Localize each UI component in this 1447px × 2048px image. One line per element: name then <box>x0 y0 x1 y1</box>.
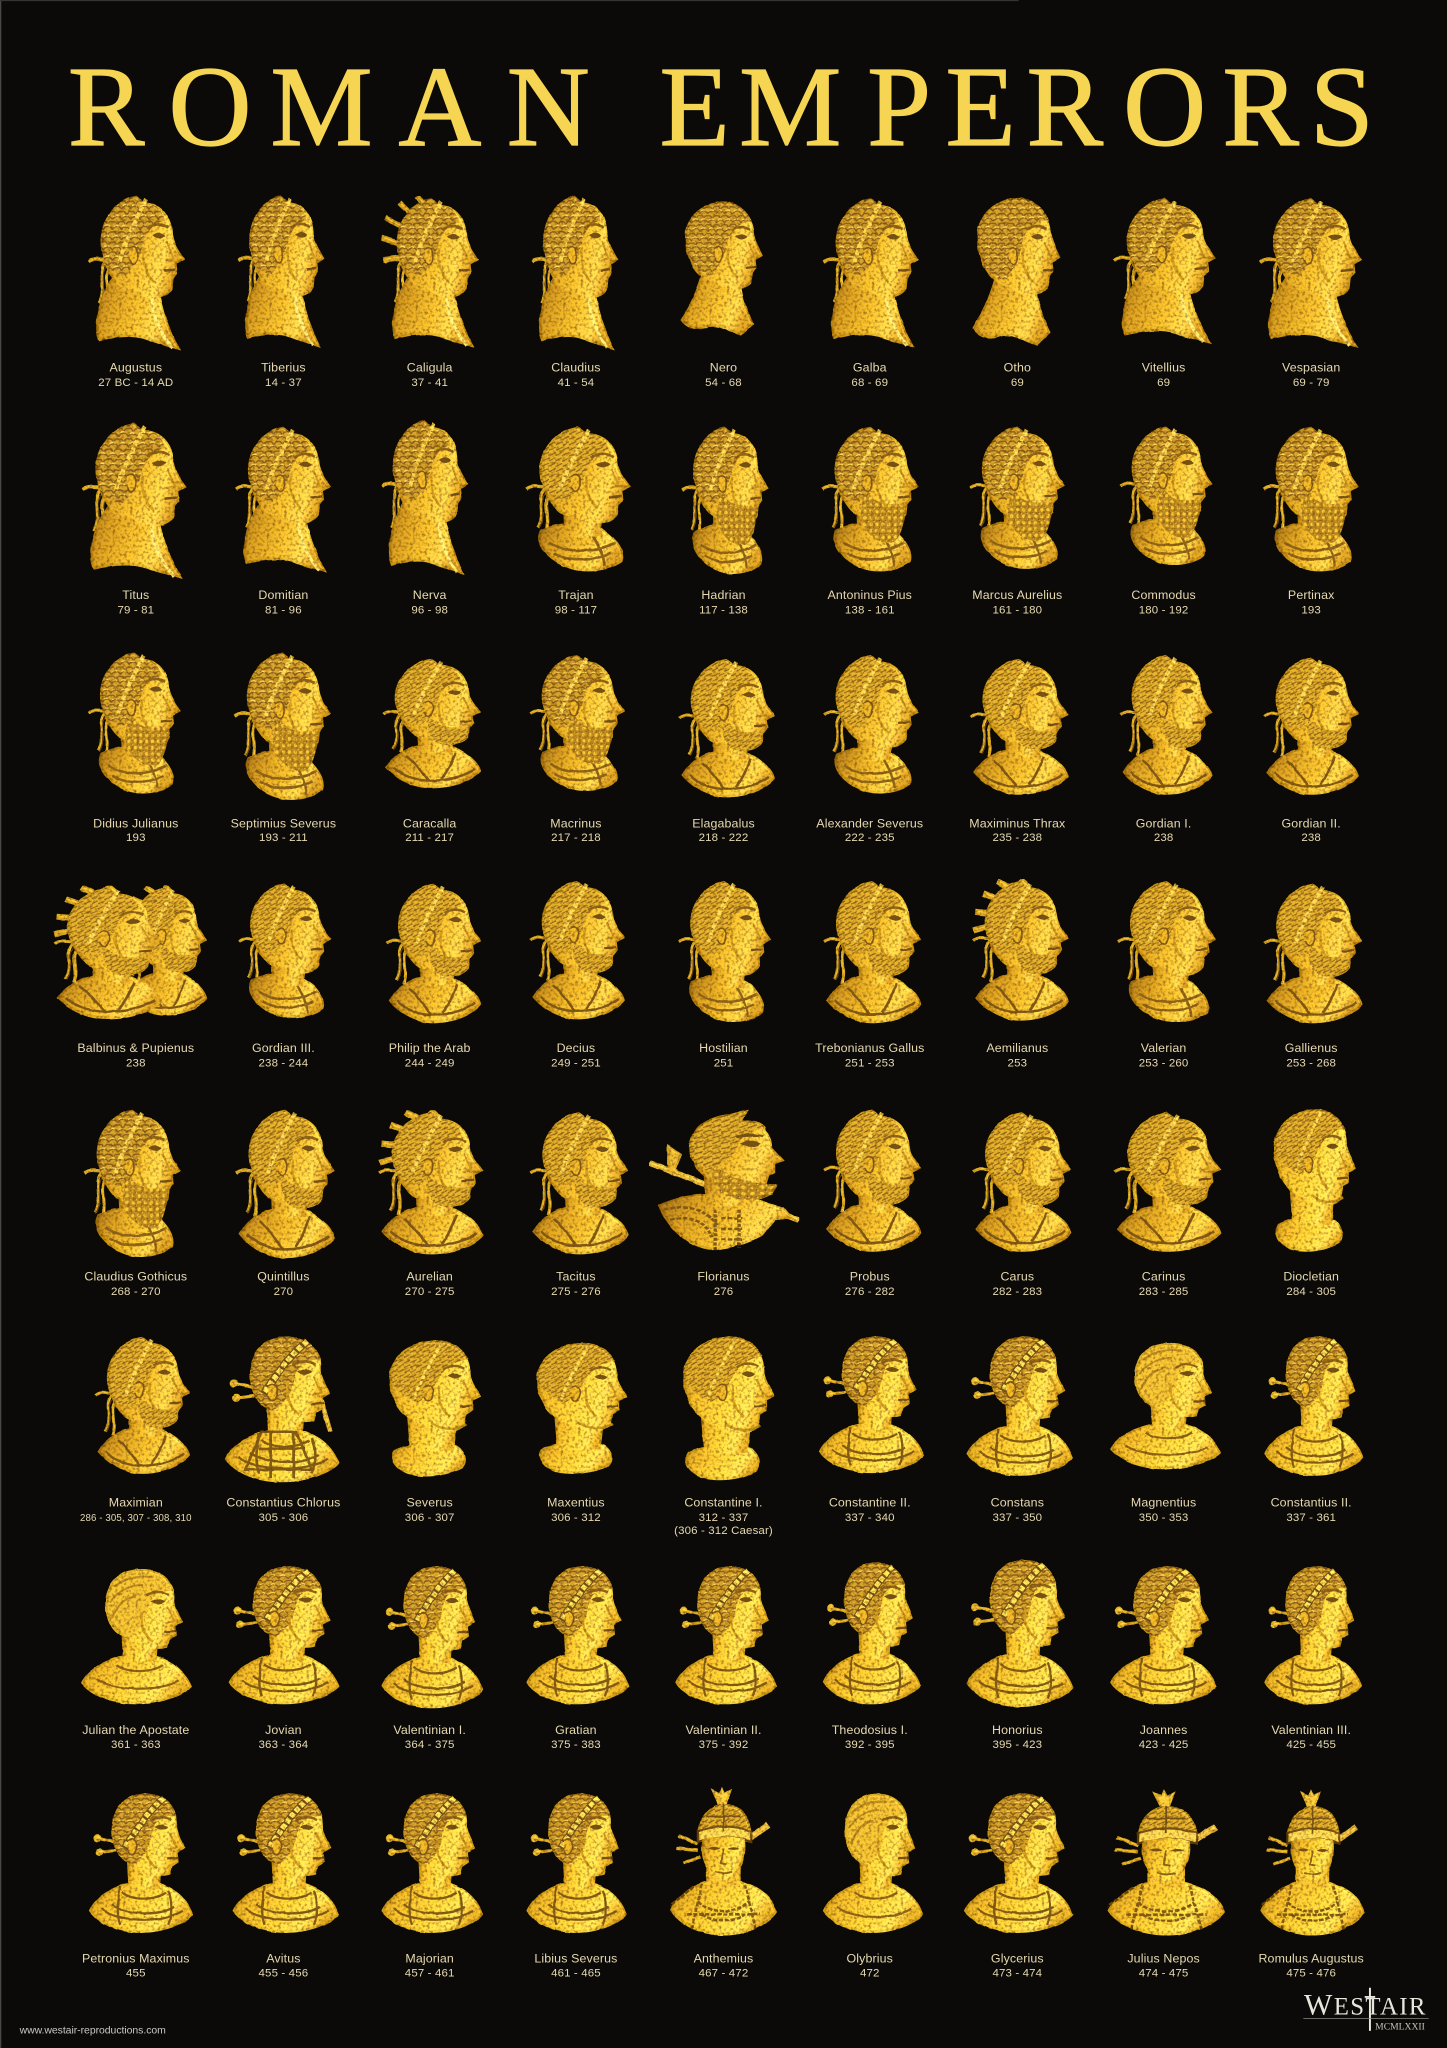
emperor: Quintillus: 270 <box>274 1286 293 1298</box>
emperor: Constantius II. <box>1264 1337 1363 1524</box>
emperor: Trajan: Trajan <box>558 588 594 602</box>
emperor: Trajan: 98 - 117 <box>555 604 597 616</box>
emperor: Pertinax: 193 <box>1301 604 1321 616</box>
emperor: Olybrius: Olybrius <box>847 1951 893 1965</box>
emperor: Petronius Maximus <box>82 1794 193 1980</box>
emperor: Valentinian I.: 364 - 375 <box>405 1739 455 1751</box>
emperor: Libius Severus: Libius Severus <box>534 1951 617 1965</box>
emperor: Quintillus <box>237 1110 335 1298</box>
emperor: Valentinian I.: Valentinian I. <box>393 1723 466 1737</box>
emperor: Diocletian: 284 - 305 <box>1286 1286 1336 1298</box>
emperor: Pertinax: Pertinax <box>1288 588 1335 602</box>
emperor: Maximinus Thrax: 235 - 238 <box>992 832 1042 844</box>
emperor: Hadrian: Hadrian <box>701 588 746 602</box>
emperor: Diocletian <box>1274 1109 1356 1298</box>
emperor: Florianus: 276 <box>714 1286 733 1298</box>
emperor: Romulus Augustus: Romulus Augustus <box>1258 1951 1364 1965</box>
emperor: Macrinus <box>530 655 625 844</box>
emperor: Alexander Severus: Alexander Severus <box>816 816 923 830</box>
emperor: Florianus: Florianus <box>697 1270 750 1284</box>
emperor: Didius Julianus: 193 <box>126 832 146 844</box>
emperor: Gordian II. <box>1264 658 1359 844</box>
emperor: Vitellius: 69 <box>1157 377 1170 389</box>
emperor: Olybrius: 472 <box>860 1968 880 1980</box>
emperor: Constantius II.: Constantius II. <box>1271 1496 1352 1510</box>
emperor: Didius Julianus <box>89 653 181 844</box>
emperor: Jovian <box>229 1566 340 1751</box>
publisher logo: Westair: WESTAIR <box>1304 1989 1426 2022</box>
emperor: Glycerius: Glycerius <box>991 1951 1044 1965</box>
emperor: Decius <box>530 881 625 1069</box>
title: ROMAN <box>68 43 590 170</box>
emperor: Valentinian I. <box>381 1566 483 1751</box>
emperor: Trebonianus Gallus <box>815 881 924 1069</box>
emperor: Claudius <box>533 196 619 389</box>
emperor: Theodosius I. <box>823 1562 921 1751</box>
emperor: Anthemius <box>670 1787 777 1980</box>
emperor: Gratian: Gratian <box>555 1723 597 1737</box>
emperor: Gallienus <box>1264 884 1363 1069</box>
emperor: Aurelian: Aurelian <box>406 1270 453 1284</box>
emperor: Philip the Arab: Philip the Arab <box>389 1041 471 1055</box>
emperor: Otho: 69 <box>1011 377 1024 389</box>
emperor: Maximinus Thrax <box>969 659 1069 844</box>
emperor: Septimius Severus: 193 - 211 <box>259 832 308 844</box>
emperor: Gordian II.: 238 <box>1301 832 1321 844</box>
emperor: Gordian II.: Gordian II. <box>1282 816 1341 830</box>
emperor: Petronius Maximus: Petronius Maximus <box>82 1951 190 1965</box>
emperor: Caligula <box>381 196 479 389</box>
emperor: Claudius Gothicus <box>84 1110 187 1298</box>
emperor: Philip the Arab <box>387 884 481 1069</box>
emperor: Claudius Gothicus: Claudius Gothicus <box>84 1270 187 1284</box>
emperor: Gordian III.: 238 - 244 <box>259 1057 309 1069</box>
emperor: Majorian: Majorian <box>405 1951 454 1965</box>
emperor: Maxentius: 306 - 312 <box>551 1512 601 1524</box>
emperor: Carinus: Carinus <box>1142 1270 1185 1284</box>
emperor: Gordian I.: Gordian I. <box>1136 816 1191 830</box>
emperor: Hostilian: Hostilian <box>699 1041 748 1055</box>
emperor: Alexander Severus <box>816 655 923 844</box>
emperor: Majorian <box>381 1794 483 1980</box>
emperor: Elagabalus <box>679 659 775 844</box>
emperor: Theodosius I.: 392 - 395 <box>845 1739 895 1751</box>
emperor: Anthemius: 467 - 472 <box>699 1968 748 1980</box>
emperor: Constantine II.: 337 - 340 <box>845 1512 895 1524</box>
emperor: Tiberius <box>239 196 325 389</box>
emperor: Valerian <box>1118 881 1216 1069</box>
emperor: Avitus: Avitus <box>266 1951 301 1965</box>
emperor: Romulus Augustus: 475 - 476 <box>1286 1968 1336 1980</box>
emperor: Domitian <box>236 427 331 616</box>
emperor: Theodosius I.: Theodosius I. <box>832 1723 908 1737</box>
emperor: Carinus <box>1115 1112 1221 1298</box>
emperor: Trebonianus Gallus: Trebonianus Gallus <box>815 1041 924 1055</box>
emperor: Valentinian III.: Valentinian III. <box>1271 1723 1351 1737</box>
emperor: Marcus Aurelius: 161 - 180 <box>992 604 1042 616</box>
emperor: Avitus: 455 - 456 <box>259 1968 308 1980</box>
emperor: Hostilian <box>679 881 771 1069</box>
emperor: Gordian III. <box>239 884 331 1069</box>
emperor: Domitian: Domitian <box>258 588 308 602</box>
emperor: Constantius Chlorus <box>225 1337 340 1524</box>
emperor: Constantius Chlorus: 305 - 306 <box>259 1512 308 1524</box>
emperor: Constantine II.: Constantine II. <box>829 1496 911 1510</box>
emperor: Joannes: 423 - 425 <box>1139 1739 1188 1751</box>
emperor: Marcus Aurelius <box>970 427 1065 616</box>
emperor: Decius: Decius <box>557 1041 595 1055</box>
emperor: Valerian: 253 - 260 <box>1139 1057 1188 1069</box>
emperor: Balbinus & Pupienus: Balbinus & Pupienus <box>77 1041 194 1055</box>
emperor: Gratian <box>526 1566 629 1751</box>
emperor: Caracalla <box>383 659 481 844</box>
emperor: Nerva: 96 - 98 <box>411 604 448 616</box>
emperor: Didius Julianus: Didius Julianus <box>93 816 178 830</box>
emperor: Aurelian <box>379 1110 484 1298</box>
emperor: Julius Nepos <box>1107 1789 1225 1980</box>
emperor: Augustus <box>89 196 185 389</box>
emperor: Julian the Apostate <box>81 1569 192 1751</box>
emperor: Galba: Galba <box>853 361 887 375</box>
emperor: Romulus Augustus <box>1258 1789 1365 1980</box>
emperor: Vitellius: Vitellius <box>1142 361 1185 375</box>
emperor: Caligula: Caligula <box>407 361 453 375</box>
emperor: Antoninus Pius: Antoninus Pius <box>828 588 912 602</box>
emperor: Marcus Aurelius: Marcus Aurelius <box>972 588 1062 602</box>
emperor: Magnentius: 350 - 353 <box>1139 1512 1188 1524</box>
emperor: Severus: 306 - 307 <box>405 1512 455 1524</box>
emperor: Valentinian III. <box>1264 1566 1362 1751</box>
emperor: Gordian III.: Gordian III. <box>252 1041 315 1055</box>
emperor: Nero: Nero <box>710 361 737 375</box>
emperor: Constans: 337 - 350 <box>992 1512 1042 1524</box>
emperor: Claudius: Claudius <box>551 361 601 375</box>
emperor: Galba <box>824 198 919 389</box>
emperor: Trebonianus Gallus: 251 - 253 <box>845 1057 895 1069</box>
emperor: Glycerius: 473 - 474 <box>992 1968 1043 1980</box>
emperor: Maximian <box>80 1337 192 1524</box>
emperor: Libius Severus <box>526 1794 627 1980</box>
emperor: Honorius: 395 - 423 <box>992 1739 1042 1751</box>
emperor: Honorius <box>966 1560 1073 1751</box>
emperor: Carus <box>973 1112 1071 1298</box>
emperor: Alexander Severus: 222 - 235 <box>845 832 895 844</box>
emperor: Aemilianus: Aemilianus <box>986 1041 1048 1055</box>
emperor: Magnentius <box>1110 1343 1221 1524</box>
emperor: Severus <box>389 1340 481 1524</box>
emperor: Nero: 54 - 68 <box>705 377 742 389</box>
emperor: Aurelian: 270 - 275 <box>405 1286 455 1298</box>
title <box>68 43 1374 170</box>
emperor: Carus: 282 - 283 <box>992 1286 1042 1298</box>
emperor: Hadrian <box>683 427 769 616</box>
emperor: Libius Severus: 461 - 465 <box>551 1968 601 1980</box>
emperor: Julian the Apostate: Julian the Apostate <box>82 1723 189 1737</box>
emperor: Valentinian II. <box>675 1566 777 1751</box>
emperor: Probus: Probus <box>850 1270 890 1284</box>
emperor: Jovian: Jovian <box>265 1723 302 1737</box>
emperor: Septimius Severus: Septimius Severus <box>231 816 336 830</box>
emperor: Gordian I. <box>1121 655 1213 844</box>
emperor: Valentinian III.: 425 - 455 <box>1286 1739 1336 1751</box>
emperor: Domitian: 81 - 96 <box>265 604 302 616</box>
emperor: Trajan <box>527 427 631 616</box>
emperor: Diocletian: Diocletian <box>1283 1270 1339 1284</box>
emperor: Hostilian: 251 <box>714 1057 733 1069</box>
emperor: Gallienus: 253 - 268 <box>1286 1057 1336 1069</box>
emperor: Tiberius: Tiberius <box>261 361 306 375</box>
emperor: Aemilianus <box>973 879 1069 1069</box>
emperor: Hadrian: 117 - 138 <box>699 604 748 616</box>
emperor: Claudius: 41 - 54 <box>558 377 595 389</box>
emperor: Olybrius <box>823 1794 923 1980</box>
emperor: Constantius II.: 337 - 361 <box>1286 1512 1336 1524</box>
emperor: Quintillus: Quintillus <box>257 1270 310 1284</box>
emperor: Aemilianus: 253 <box>1008 1057 1027 1069</box>
emperor: Florianus <box>649 1110 799 1298</box>
emperor: Constantine II. <box>819 1336 925 1524</box>
emperor: Elagabalus: Elagabalus <box>692 816 755 830</box>
emperor: Constans <box>966 1337 1073 1524</box>
title: EMPERORS <box>660 43 1374 170</box>
emperor: Elagabalus: 218 - 222 <box>699 832 748 844</box>
emperor: Otho <box>972 198 1060 389</box>
emperor: Anthemius: Anthemius <box>694 1951 753 1965</box>
emperor: Joannes: Joannes <box>1140 1723 1187 1737</box>
website url: www.westair-reproductions.com <box>19 2026 166 2037</box>
emperor: Tacitus: Tacitus <box>556 1270 596 1284</box>
emperor: Philip the Arab: 244 - 249 <box>405 1057 455 1069</box>
emperor: Septimius Severus <box>231 653 336 844</box>
emperor: Julius Nepos: 474 - 475 <box>1139 1968 1188 1980</box>
emperor: Vespasian: Vespasian <box>1282 361 1340 375</box>
emperor: Commodus <box>1121 427 1213 616</box>
emperor: Commodus: Commodus <box>1131 588 1196 602</box>
emperor: Probus: 276 - 282 <box>845 1286 895 1298</box>
emperor: Carus: Carus <box>1000 1270 1034 1284</box>
emperor: Jovian: 363 - 364 <box>259 1739 309 1751</box>
emperor: Galba: 68 - 69 <box>851 377 888 389</box>
emperor: Augustus: Augustus <box>109 361 162 375</box>
emperor: Julian the Apostate: 361 - 363 <box>111 1739 161 1751</box>
emperor: Vitellius <box>1114 198 1216 389</box>
emperor: Maximinus Thrax: Maximinus Thrax <box>969 816 1066 830</box>
emperor: Antoninus Pius <box>823 427 919 616</box>
emperor: Nero <box>681 202 763 389</box>
publisher logo: Westair: MCMLXXII <box>1375 2022 1425 2032</box>
emperor: Constantine I.: 312 - 337 <box>699 1512 748 1524</box>
emperor: Constantine I.: (306 - 312 Caesar) <box>674 1525 773 1537</box>
emperor: Gratian: 375 - 383 <box>551 1739 601 1751</box>
emperor: Valerian: Valerian <box>1141 1041 1186 1055</box>
emperor: Severus: Severus <box>406 1496 453 1510</box>
emperor: Maxentius: Maxentius <box>547 1496 605 1510</box>
emperor: Vespasian <box>1261 198 1363 389</box>
emperor: Macrinus: Macrinus <box>550 816 602 830</box>
emperor: Tacitus <box>530 1112 629 1298</box>
emperor: Honorius: Honorius <box>992 1723 1043 1737</box>
emperor: Glycerius <box>964 1794 1073 1980</box>
emperor: Gallienus: Gallienus <box>1285 1041 1338 1055</box>
emperor: Vespasian: 69 - 79 <box>1293 377 1330 389</box>
emperor: Antoninus Pius: 138 - 161 <box>845 604 895 616</box>
emperor: Valentinian II.: 375 - 392 <box>699 1739 748 1751</box>
emperor: Magnentius: Magnentius <box>1131 1496 1196 1510</box>
emperor: Caracalla: 211 - 217 <box>405 832 454 844</box>
emperor: Julius Nepos: Julius Nepos <box>1127 1951 1200 1965</box>
emperor: Macrinus: 217 - 218 <box>551 832 601 844</box>
emperor: Caligula: 37 - 41 <box>411 377 448 389</box>
emperor: Titus: 79 - 81 <box>117 604 154 616</box>
emperor: Maximian: 286 - 305, 307 - 308, 310 <box>80 1513 192 1524</box>
emperor: Balbinus & Pupienus: 238 <box>126 1057 146 1069</box>
emperor: Titus: Titus <box>122 588 149 602</box>
emperor: Pertinax <box>1264 427 1359 616</box>
emperor: Tiberius: 14 - 37 <box>265 377 302 389</box>
emperor: Carinus: 283 - 285 <box>1139 1286 1188 1298</box>
emperor: Commodus: 180 - 192 <box>1139 604 1188 616</box>
emperor: Tacitus: 275 - 276 <box>551 1286 601 1298</box>
emperor: Joannes <box>1110 1566 1217 1751</box>
emperor: Decius: 249 - 251 <box>551 1057 601 1069</box>
emperor: Valentinian II.: Valentinian II. <box>685 1723 762 1737</box>
emperor: Titus <box>83 423 187 616</box>
emperor: Probus <box>824 1110 921 1298</box>
emperor: Gordian I.: 238 <box>1154 832 1173 844</box>
emperor: Avitus <box>232 1794 340 1980</box>
emperor: Constans: Constans <box>991 1496 1044 1510</box>
emperor: Claudius Gothicus: 268 - 270 <box>111 1286 161 1298</box>
emperor: Nerva: Nerva <box>413 588 447 602</box>
emperor: Balbinus & Pupienus <box>54 886 207 1069</box>
emperor: Constantine I.: Constantine I. <box>684 1496 763 1510</box>
emperor: Majorian: 457 - 461 <box>405 1968 455 1980</box>
emperor: Maximian: Maximian <box>109 1496 163 1510</box>
emperor: Nerva <box>382 420 468 616</box>
emperor: Constantine I. <box>674 1337 775 1537</box>
emperor: Maxentius <box>537 1343 627 1524</box>
emperor: Otho: Otho <box>1004 361 1031 375</box>
emperor: Petronius Maximus: 455 <box>126 1968 146 1980</box>
emperor: Constantius Chlorus: Constantius Chlorus <box>226 1496 340 1510</box>
emperor: Augustus: 27 BC - 14 AD <box>98 377 173 389</box>
emperor: Caracalla: Caracalla <box>403 816 456 830</box>
